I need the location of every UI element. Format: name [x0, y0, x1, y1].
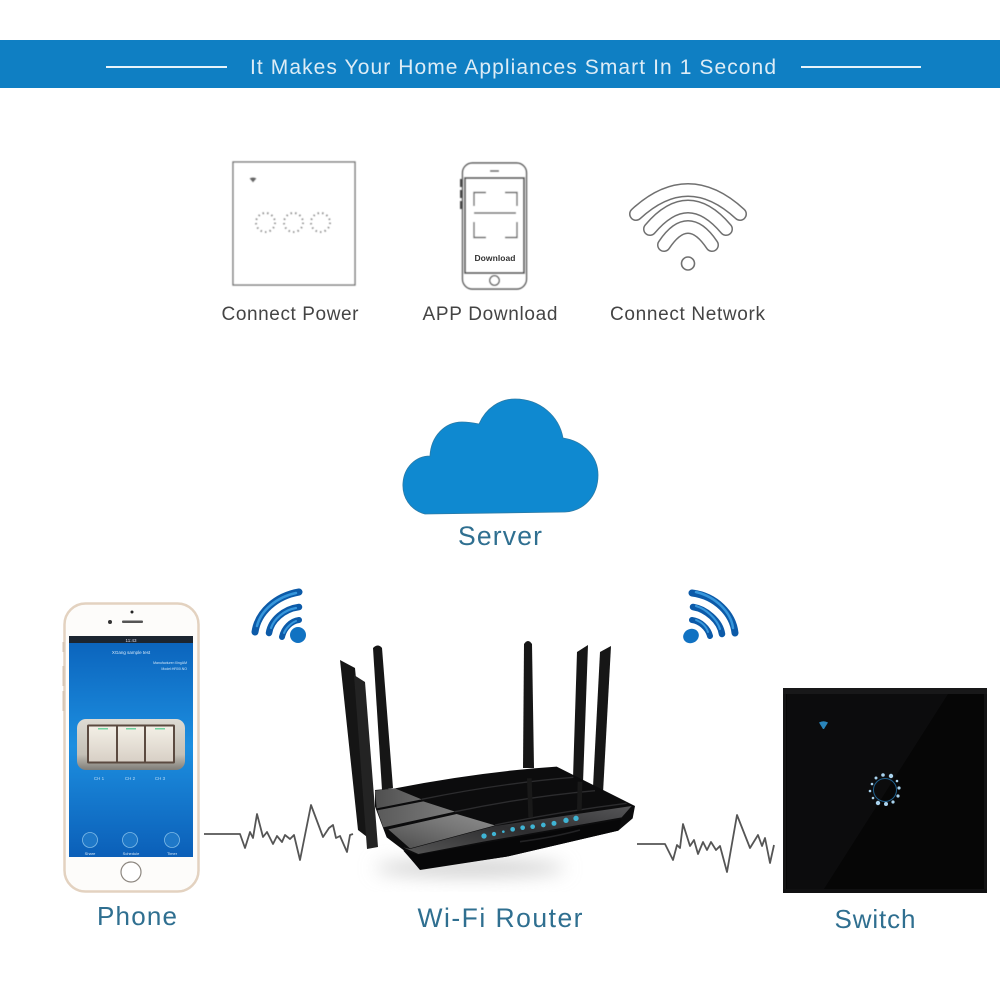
router [340, 641, 635, 933]
grey panels [375, 788, 422, 808]
label: phone: Phone [97, 901, 177, 931]
glass ridges [422, 777, 627, 825]
phone screen: Share [85, 851, 96, 856]
phone screen [69, 636, 193, 857]
front lip [403, 806, 632, 854]
three-gang switch [77, 719, 185, 770]
back antennas [373, 641, 611, 793]
signal wave: phone to router [204, 805, 353, 860]
icon: cloud server [403, 399, 598, 551]
antenna reflections [529, 778, 580, 817]
step: app download [422, 163, 558, 325]
signal icon: right wifi [681, 592, 735, 646]
icon: phone outline [461, 163, 526, 289]
label: app download: APP Download [422, 304, 558, 325]
step: connect power [222, 162, 359, 325]
front antennas [340, 660, 378, 849]
icon: wifi outline [636, 190, 740, 270]
label: connect network: Connect Network [610, 304, 766, 325]
phone screen: CH 1 [94, 776, 105, 781]
icon text: download: Download [474, 253, 516, 263]
label: server: Server [458, 521, 542, 551]
wifi indicator [819, 721, 828, 729]
banner title: It Makes Your Home Appliances Smart In 1 Second [250, 56, 776, 79]
touch ring [869, 773, 901, 806]
phone screen: Schedule [123, 851, 140, 856]
wall switch [783, 688, 987, 934]
signal icon: left wifi [255, 592, 306, 643]
phone screen: XGang sample test [112, 650, 151, 655]
banner [0, 40, 1000, 88]
phone screen: Manufacturer:XingAM [153, 661, 187, 665]
phone screen: Model:HR00.NO [161, 667, 187, 671]
phone screen: CH 2 [125, 776, 136, 781]
step: connect network [610, 190, 766, 325]
phone [62, 604, 198, 931]
phone screen: 11:43 [126, 638, 137, 643]
router body: coordinates at 3x about (340,740) [375, 767, 635, 870]
label: wifi router: Wi-Fi Router [418, 903, 583, 933]
label: connect power: Connect Power [222, 304, 359, 325]
phone screen: CH 3 [155, 776, 166, 781]
glass panel [783, 688, 987, 893]
signal wave: router to switch [637, 815, 774, 872]
label: switch: Switch [834, 904, 916, 934]
phone body [64, 604, 198, 892]
icon: wall switch outline [233, 162, 355, 285]
home button [121, 862, 141, 882]
phone screen: Timer [167, 851, 178, 856]
status LEDs [481, 816, 579, 839]
